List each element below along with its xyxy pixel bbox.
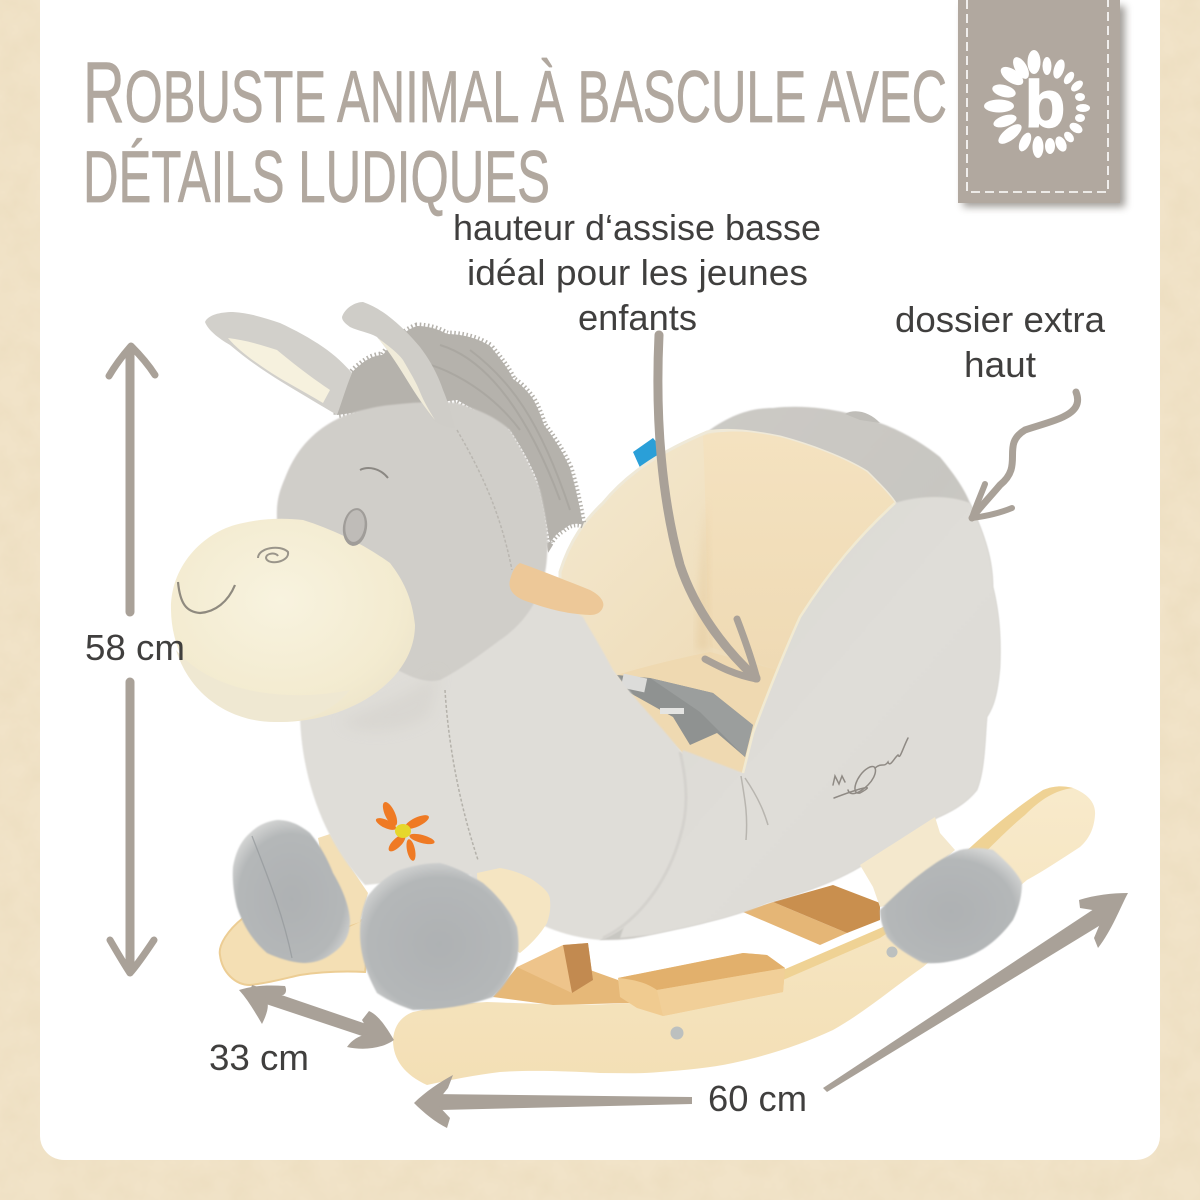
seat shell grey bbox=[600, 407, 1000, 940]
safety belt bbox=[617, 674, 753, 757]
corner shade bbox=[696, 500, 710, 650]
foot rest bbox=[618, 946, 898, 1040]
seat back panel bbox=[703, 431, 895, 670]
right ear inner bbox=[378, 338, 435, 420]
arrow: height lower bbox=[110, 682, 154, 973]
rear right rocker brace bbox=[743, 885, 880, 945]
embroidered signature bbox=[833, 738, 908, 798]
label: low seat height: idéal pour les jeunes bbox=[467, 252, 808, 293]
muzzle lower bbox=[176, 650, 350, 722]
rim cream edge bbox=[743, 503, 895, 773]
head bbox=[277, 402, 548, 681]
seam under seat bbox=[741, 776, 768, 840]
title bbox=[83, 45, 947, 218]
screws bbox=[670, 1026, 684, 1040]
body front bbox=[300, 590, 685, 940]
product: donkey rocking toy bbox=[171, 302, 1095, 1085]
arrow: depth 33 cm bbox=[239, 985, 394, 1049]
logo letter b: b bbox=[1025, 67, 1065, 141]
seat cushion bbox=[617, 652, 777, 773]
rear left rocker bbox=[220, 915, 372, 985]
seat back top button bbox=[845, 411, 880, 423]
mane fur bbox=[400, 345, 570, 510]
rear left hoof bbox=[233, 820, 350, 963]
front hoof bbox=[360, 863, 518, 1010]
left ear bbox=[205, 312, 352, 415]
muzzle bbox=[171, 519, 415, 722]
central under brace bbox=[493, 943, 630, 1005]
mouth bbox=[178, 582, 235, 613]
arrow: width 60 cm lower bbox=[414, 1075, 692, 1128]
label: low seat height bbox=[453, 207, 821, 338]
nostril bbox=[258, 548, 288, 562]
arrow: high backrest pointer bbox=[972, 392, 1078, 518]
label: width: 60 cm bbox=[708, 1078, 807, 1119]
eye bbox=[340, 507, 370, 547]
body seam bbox=[445, 690, 478, 860]
blue label bbox=[633, 438, 668, 472]
arrow: low seat pointer bbox=[658, 335, 757, 679]
seat interior cream bbox=[560, 430, 895, 773]
flower embroidery bbox=[374, 800, 436, 862]
right hoof bbox=[880, 848, 1022, 963]
right ear bbox=[342, 302, 455, 428]
right leg bbox=[860, 817, 955, 907]
title: DÉTAILS LUDIQUES bbox=[83, 137, 550, 218]
label: low seat height: hauteur d‘assise basse bbox=[453, 207, 821, 248]
rocker top face bbox=[783, 786, 1073, 980]
wooden handle bbox=[510, 563, 603, 615]
fold shade bbox=[603, 752, 686, 938]
brand tag bbox=[958, 0, 1125, 207]
rear left hub bbox=[318, 834, 368, 930]
label: height: 58 cm bbox=[85, 627, 185, 668]
label: depth: 33 cm bbox=[209, 1037, 309, 1078]
eyelid bbox=[360, 468, 388, 478]
head seam bbox=[457, 430, 512, 570]
neck shadow bbox=[340, 670, 440, 731]
left ear inner bbox=[228, 338, 330, 403]
label: extra high backrest bbox=[895, 299, 1106, 385]
label: low seat height: enfants bbox=[578, 297, 697, 338]
label: extra high backrest: dossier extra bbox=[895, 299, 1106, 340]
arrow: height upper bbox=[109, 346, 155, 612]
arrow: width 60 cm upper bbox=[823, 893, 1128, 1092]
front wheel-hub cream leg bbox=[477, 868, 550, 953]
label: extra high backrest: haut bbox=[964, 344, 1036, 385]
icon: flower logo bbox=[984, 50, 1090, 158]
seat front grey rim bbox=[620, 497, 1000, 938]
front rocker bbox=[393, 786, 1095, 1085]
mane bbox=[337, 326, 583, 543]
